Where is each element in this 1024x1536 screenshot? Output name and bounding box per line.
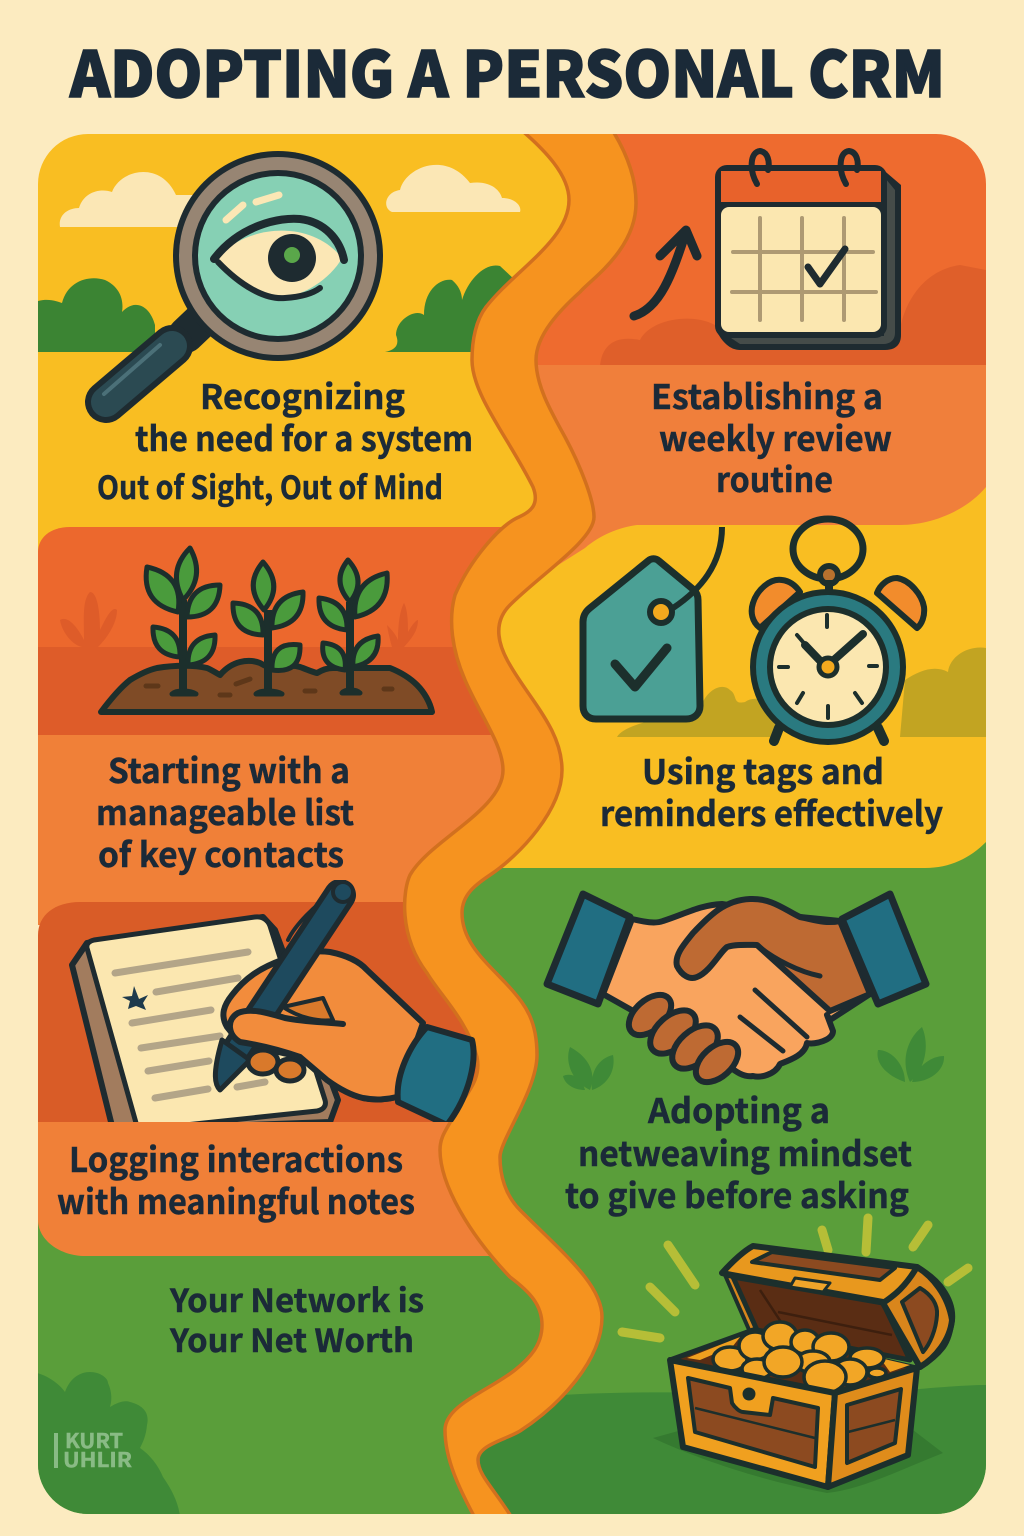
text: tags and reminders: reminders effectively (600, 787, 943, 836)
text: your network: Your Net Worth (169, 1316, 414, 1362)
panel: tags background (500, 487, 986, 868)
panel: logging background (38, 902, 489, 1256)
rays (622, 1218, 968, 1338)
notebook (72, 917, 338, 1130)
text: recognizing the need (135, 370, 473, 461)
chest body (670, 1360, 835, 1487)
icon: tuft right (877, 1027, 944, 1082)
text: tags and reminders (600, 745, 943, 836)
icon: cloud left (60, 172, 192, 227)
title: ADOPTING A PERSONAL CRM (69, 25, 945, 116)
back of hand (223, 951, 423, 1099)
text: out of sight: Out of Sight, Out of Mind (97, 463, 443, 509)
coins (670, 1330, 917, 1393)
plant three (319, 560, 387, 693)
text: logging interactions: with meaningful notes (57, 1175, 415, 1224)
icon: magnifying glass with eye (104, 151, 383, 402)
lid (722, 1246, 952, 1367)
icon: alarm clock (752, 519, 924, 742)
icon: treasure chest with coins (622, 1218, 968, 1493)
panel: network background (38, 1220, 540, 1514)
handle (104, 316, 206, 402)
icon: cloud right (386, 165, 520, 212)
text: tags and reminders: Using tags and (642, 745, 884, 794)
cuff (398, 1027, 474, 1125)
text: netweaving mindset: netweaving mindset (578, 1127, 912, 1176)
text: netweaving mindset (565, 1084, 912, 1218)
text: your network: Your Network is (169, 1276, 424, 1322)
winding orange river (405, 128, 636, 1518)
icon: bush bottom left (37, 1372, 180, 1516)
panel: recognizing background (38, 134, 568, 552)
plant one (146, 548, 220, 694)
arrow (634, 230, 697, 316)
icon: bush left (38, 278, 155, 352)
text: weekly review (651, 370, 892, 502)
icon: tag with checkmark (583, 527, 722, 719)
text: recognizing the need: the need for a system (135, 412, 473, 461)
text: logging interactions (57, 1133, 415, 1224)
plant two (233, 562, 303, 694)
icon: notebook and writing hand (72, 882, 474, 1130)
text: weekly review: Establishing a (651, 370, 883, 419)
right column panels (440, 134, 986, 1520)
icon: seedlings in soil (101, 548, 432, 712)
text: key contacts (96, 744, 354, 877)
text: netweaving mindset: Adopting a (647, 1084, 830, 1133)
logo: Kurt Uhlir: KURT (65, 1425, 123, 1454)
text: weekly review: routine (716, 453, 833, 502)
pen (215, 882, 353, 1090)
text: key contacts: Starting with a (108, 744, 350, 793)
text: key contacts: manageable list (96, 786, 354, 835)
text: key contacts: of key contacts (98, 828, 344, 877)
text: recognizing the need: Recognizing (200, 370, 405, 419)
icon: bush right (385, 265, 515, 352)
panel: key contacts background (38, 527, 502, 925)
panel: green lower right background (440, 835, 986, 1520)
panel: weekly review background (538, 134, 986, 565)
logo: Kurt Uhlir (56, 1425, 132, 1473)
icon: handshake (547, 894, 926, 1090)
icon: tuft left (563, 1047, 614, 1090)
text: weekly review: weekly review (659, 412, 892, 461)
text: your network (169, 1276, 424, 1362)
logo: Kurt Uhlir: UHLIR (63, 1444, 132, 1473)
soil mound (101, 661, 432, 712)
text: netweaving mindset: to give before asking (565, 1169, 909, 1218)
text: logging interactions: Logging interactions (69, 1133, 403, 1182)
icon: calendar with checkmark and arrow (634, 151, 901, 350)
fingers (248, 1050, 278, 1074)
